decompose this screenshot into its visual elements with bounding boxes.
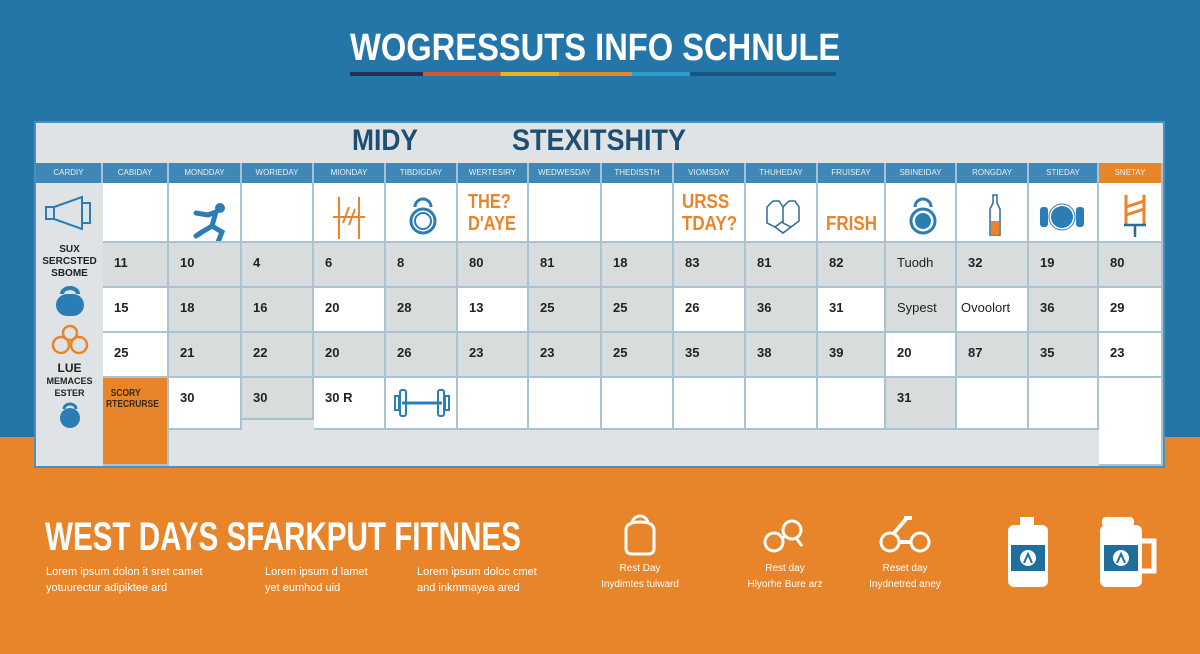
schedule grid: 25 (540, 300, 554, 315)
schedule grid: 83 (685, 255, 699, 270)
schedule grid: 26 (397, 345, 411, 360)
schedule grid: 31 (829, 300, 843, 315)
rest day icon 1: Rest Day (619, 563, 661, 574)
schedule grid: 35 (1040, 345, 1054, 360)
schedule grid: MIONDAY (331, 168, 367, 177)
row 2 (103, 288, 169, 333)
schedule grid: 36 (757, 300, 771, 315)
schedule card (34, 121, 1165, 468)
schedule grid: 6 (325, 255, 332, 270)
schedule grid: 16 (253, 300, 267, 315)
row 4: RTECRURSE (106, 399, 159, 410)
rest day icon 3: Reset day (882, 563, 928, 574)
rest day icon 3 (869, 516, 941, 590)
row 1 (103, 243, 169, 288)
rest day icon 2: Hlyorhe Bure arz (747, 579, 823, 590)
schedule grid: 80 (469, 255, 483, 270)
schedule grid: 20 (325, 300, 339, 315)
schedule grid: SBINEIDAY (899, 168, 942, 177)
row 1: 11 (114, 255, 128, 270)
card heading (352, 124, 686, 157)
row 3: 25 (114, 345, 128, 360)
card heading: MIDY (352, 124, 418, 157)
schedule grid: Ovoolort (961, 300, 1010, 315)
schedule grid: 80 (1110, 255, 1124, 270)
schedule grid: RONGDAY (972, 168, 1012, 177)
schedule grid: 19 (1040, 255, 1054, 270)
schedule grid: FRISH (826, 213, 877, 235)
bottom text blocks: yotuurectur adipiktee ard (46, 582, 167, 594)
bottom text blocks: Lorem ipsum dolon it sret camet (46, 566, 203, 578)
card heading: STEXITSHITY (512, 124, 686, 157)
schedule grid: 81 (540, 255, 554, 270)
rest day icon 3: Inydnetred aney (869, 579, 941, 590)
schedule grid: URSS (682, 191, 729, 213)
schedule grid: 13 (469, 300, 483, 315)
schedule grid: Tuodh (897, 255, 933, 270)
schedule grid (36, 163, 1163, 466)
schedule grid: CARDIY (53, 168, 84, 177)
schedule grid: THEDISSTH (614, 168, 660, 177)
schedule grid: 8 (397, 255, 404, 270)
schedule grid: CABIDAY (118, 168, 152, 177)
schedule grid: 39 (829, 345, 843, 360)
text: and inkmmayea ared (417, 582, 520, 594)
schedule grid: 32 (968, 255, 982, 270)
schedule grid: D'AYE (468, 213, 516, 235)
schedule grid: MONDDAY (184, 168, 225, 177)
icon row (103, 183, 169, 243)
left column labels and icons: SBOME (51, 268, 88, 279)
left column labels and icons: ESTER (54, 388, 84, 398)
schedule grid: 82 (829, 255, 843, 270)
schedule grid: TIBDIGDAY (400, 168, 442, 177)
schedule grid: VIOMSDAY (688, 168, 730, 177)
icon: bottle (1008, 517, 1048, 587)
schedule grid: THE? (468, 191, 511, 213)
schedule grid: STIEDAY (1046, 168, 1080, 177)
schedule grid: WERTESIRY (469, 168, 516, 177)
schedule grid: 4 (253, 255, 260, 270)
left column labels and icons: LUE (58, 361, 82, 375)
icon: rings (52, 324, 88, 354)
schedule grid: SNETAY (1115, 168, 1145, 177)
left column labels and icons (42, 196, 97, 428)
schedule grid: Sypest (897, 300, 937, 315)
icon: jug (1100, 517, 1156, 587)
schedule grid: 30 R (325, 390, 352, 405)
schedule grid: WORIEDAY (256, 168, 298, 177)
rest day icon 2: Rest day (765, 563, 805, 574)
schedule grid: 23 (1110, 345, 1124, 360)
schedule grid: 23 (469, 345, 483, 360)
title color bar (350, 72, 836, 76)
text: Lorem ipsum doloc cmet (417, 566, 537, 578)
schedule grid: 81 (757, 255, 771, 270)
schedule grid: THUHEDAY (759, 168, 803, 177)
schedule grid: 29 (1110, 300, 1124, 315)
schedule grid: 30 (180, 390, 194, 405)
rest day icon 2 (747, 520, 823, 590)
schedule grid: 25 (613, 345, 627, 360)
schedule grid: 28 (397, 300, 411, 315)
left column labels and icons: SUX (59, 244, 80, 255)
schedule grid: 21 (180, 345, 194, 360)
schedule grid: 38 (757, 345, 771, 360)
left column labels and icons: SERCSTED (42, 256, 97, 267)
schedule grid: 30 (253, 390, 267, 405)
schedule grid: 20 (897, 345, 911, 360)
rest day icon 1 (601, 514, 679, 590)
schedule grid: 22 (253, 345, 267, 360)
text: yet eumhod uid (265, 582, 340, 594)
row 2: 15 (114, 300, 128, 315)
icon: kettlebell (56, 286, 84, 316)
row 4 (103, 378, 169, 466)
schedule grid: 10 (180, 255, 194, 270)
bottom heading: WEST DAYS SFARKPUT FITNNES (45, 515, 521, 559)
schedule grid: 26 (685, 300, 699, 315)
schedule grid: 20 (325, 345, 339, 360)
schedule grid: 36 (1040, 300, 1054, 315)
row 4: SCORY (111, 388, 141, 399)
schedule grid: 25 (613, 300, 627, 315)
schedule grid: 18 (180, 300, 194, 315)
schedule grid: 35 (685, 345, 699, 360)
left column labels and icons: MEMACES (46, 376, 92, 386)
schedule grid: 23 (540, 345, 554, 360)
title: WOGRESSUTS INFO SCHNULE (350, 27, 840, 69)
schedule grid: 87 (968, 345, 982, 360)
schedule grid: 18 (613, 255, 627, 270)
rest day icon 1: Inydimtes tuiward (601, 579, 679, 590)
schedule grid: WEDWESDAY (538, 168, 591, 177)
schedule grid: 31 (897, 390, 911, 405)
row 3 (103, 333, 169, 378)
icon: megaphone (45, 196, 91, 230)
schedule grid: FRUISEAY (831, 168, 871, 177)
schedule grid: TDAY? (682, 213, 737, 235)
bottom text blocks (46, 566, 203, 594)
text: Lorem ipsum d lamet (265, 566, 368, 578)
